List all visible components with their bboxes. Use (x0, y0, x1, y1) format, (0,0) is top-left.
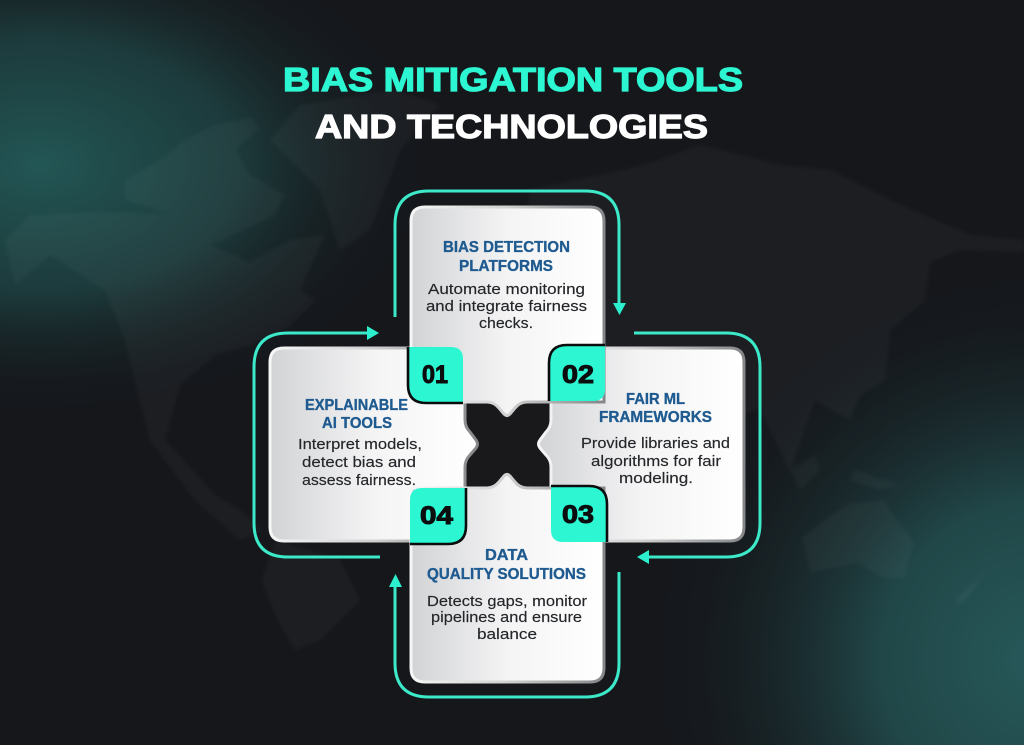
title (283, 61, 743, 145)
heading: explainable AI tools: EXPLAINABLE (305, 397, 408, 414)
text: bias detection description: and integrate fairness (426, 298, 587, 315)
heading: fair ML frameworks (599, 391, 712, 426)
heading: explainable AI tools (305, 397, 408, 432)
arrow: right loop to card 03 (634, 333, 760, 564)
badge 04: 04 (420, 502, 453, 530)
arrow: left loop to card 01 (254, 326, 380, 557)
badge 01 (408, 347, 463, 403)
heading: fair ML frameworks: FAIR ML (626, 391, 685, 408)
heading: data quality solutions: DATA (485, 547, 528, 564)
panel: explainable AI tools (270, 348, 478, 541)
text: fair ML frameworks description: modeling. (619, 470, 693, 487)
heading: explainable AI tools: AI TOOLS (322, 415, 392, 432)
arrow: top loop to card 02 (395, 191, 626, 317)
text: fair ML frameworks description: algorithms for fair (591, 453, 721, 470)
center dark cross (462, 400, 554, 490)
text: explainable AI tools description: Interpret models, (298, 436, 422, 453)
text: data quality description: Detects gaps, monitor (427, 593, 587, 610)
world map silhouette (5, 90, 1024, 650)
badge 04 (410, 488, 466, 544)
badge 02: 02 (562, 361, 594, 389)
text: bias detection description: checks. (479, 315, 533, 332)
panel: bias detection platforms (411, 207, 604, 416)
title: BIAS MITIGATION TOOLS (283, 61, 743, 98)
text: data quality description: balance (477, 626, 537, 643)
badge 03 (551, 486, 607, 542)
arrow: bottom loop to card 04 (389, 572, 619, 697)
text: explainable AI tools description (298, 436, 422, 489)
text: explainable AI tools description: assess fairness. (302, 472, 416, 489)
heading: fair ML frameworks: FRAMEWORKS (599, 409, 712, 426)
text: explainable AI tools description: detect bias and (302, 454, 416, 471)
heading: bias detection platforms: BIAS DETECTION (443, 239, 570, 256)
badge 01: 01 (422, 361, 448, 389)
heading: bias detection platforms (443, 239, 570, 275)
text: data quality description (427, 593, 587, 643)
heading: data quality solutions (427, 547, 586, 583)
text: bias detection description: Automate monitoring (428, 281, 585, 298)
text: fair ML frameworks description: Provide libraries and (581, 435, 730, 452)
heading: data quality solutions: QUALITY SOLUTIONS (427, 566, 586, 583)
title: AND TECHNOLOGIES (315, 108, 708, 145)
badge 03: 03 (562, 501, 594, 529)
panel: fair ML frameworks (538, 348, 744, 541)
text: bias detection description (426, 281, 587, 332)
panel: data quality solutions (411, 474, 604, 682)
badge 02 (549, 345, 605, 401)
text: data quality description: pipelines and ensure (431, 609, 582, 626)
text: fair ML frameworks description (581, 435, 730, 487)
heading: bias detection platforms: PLATFORMS (459, 258, 553, 275)
